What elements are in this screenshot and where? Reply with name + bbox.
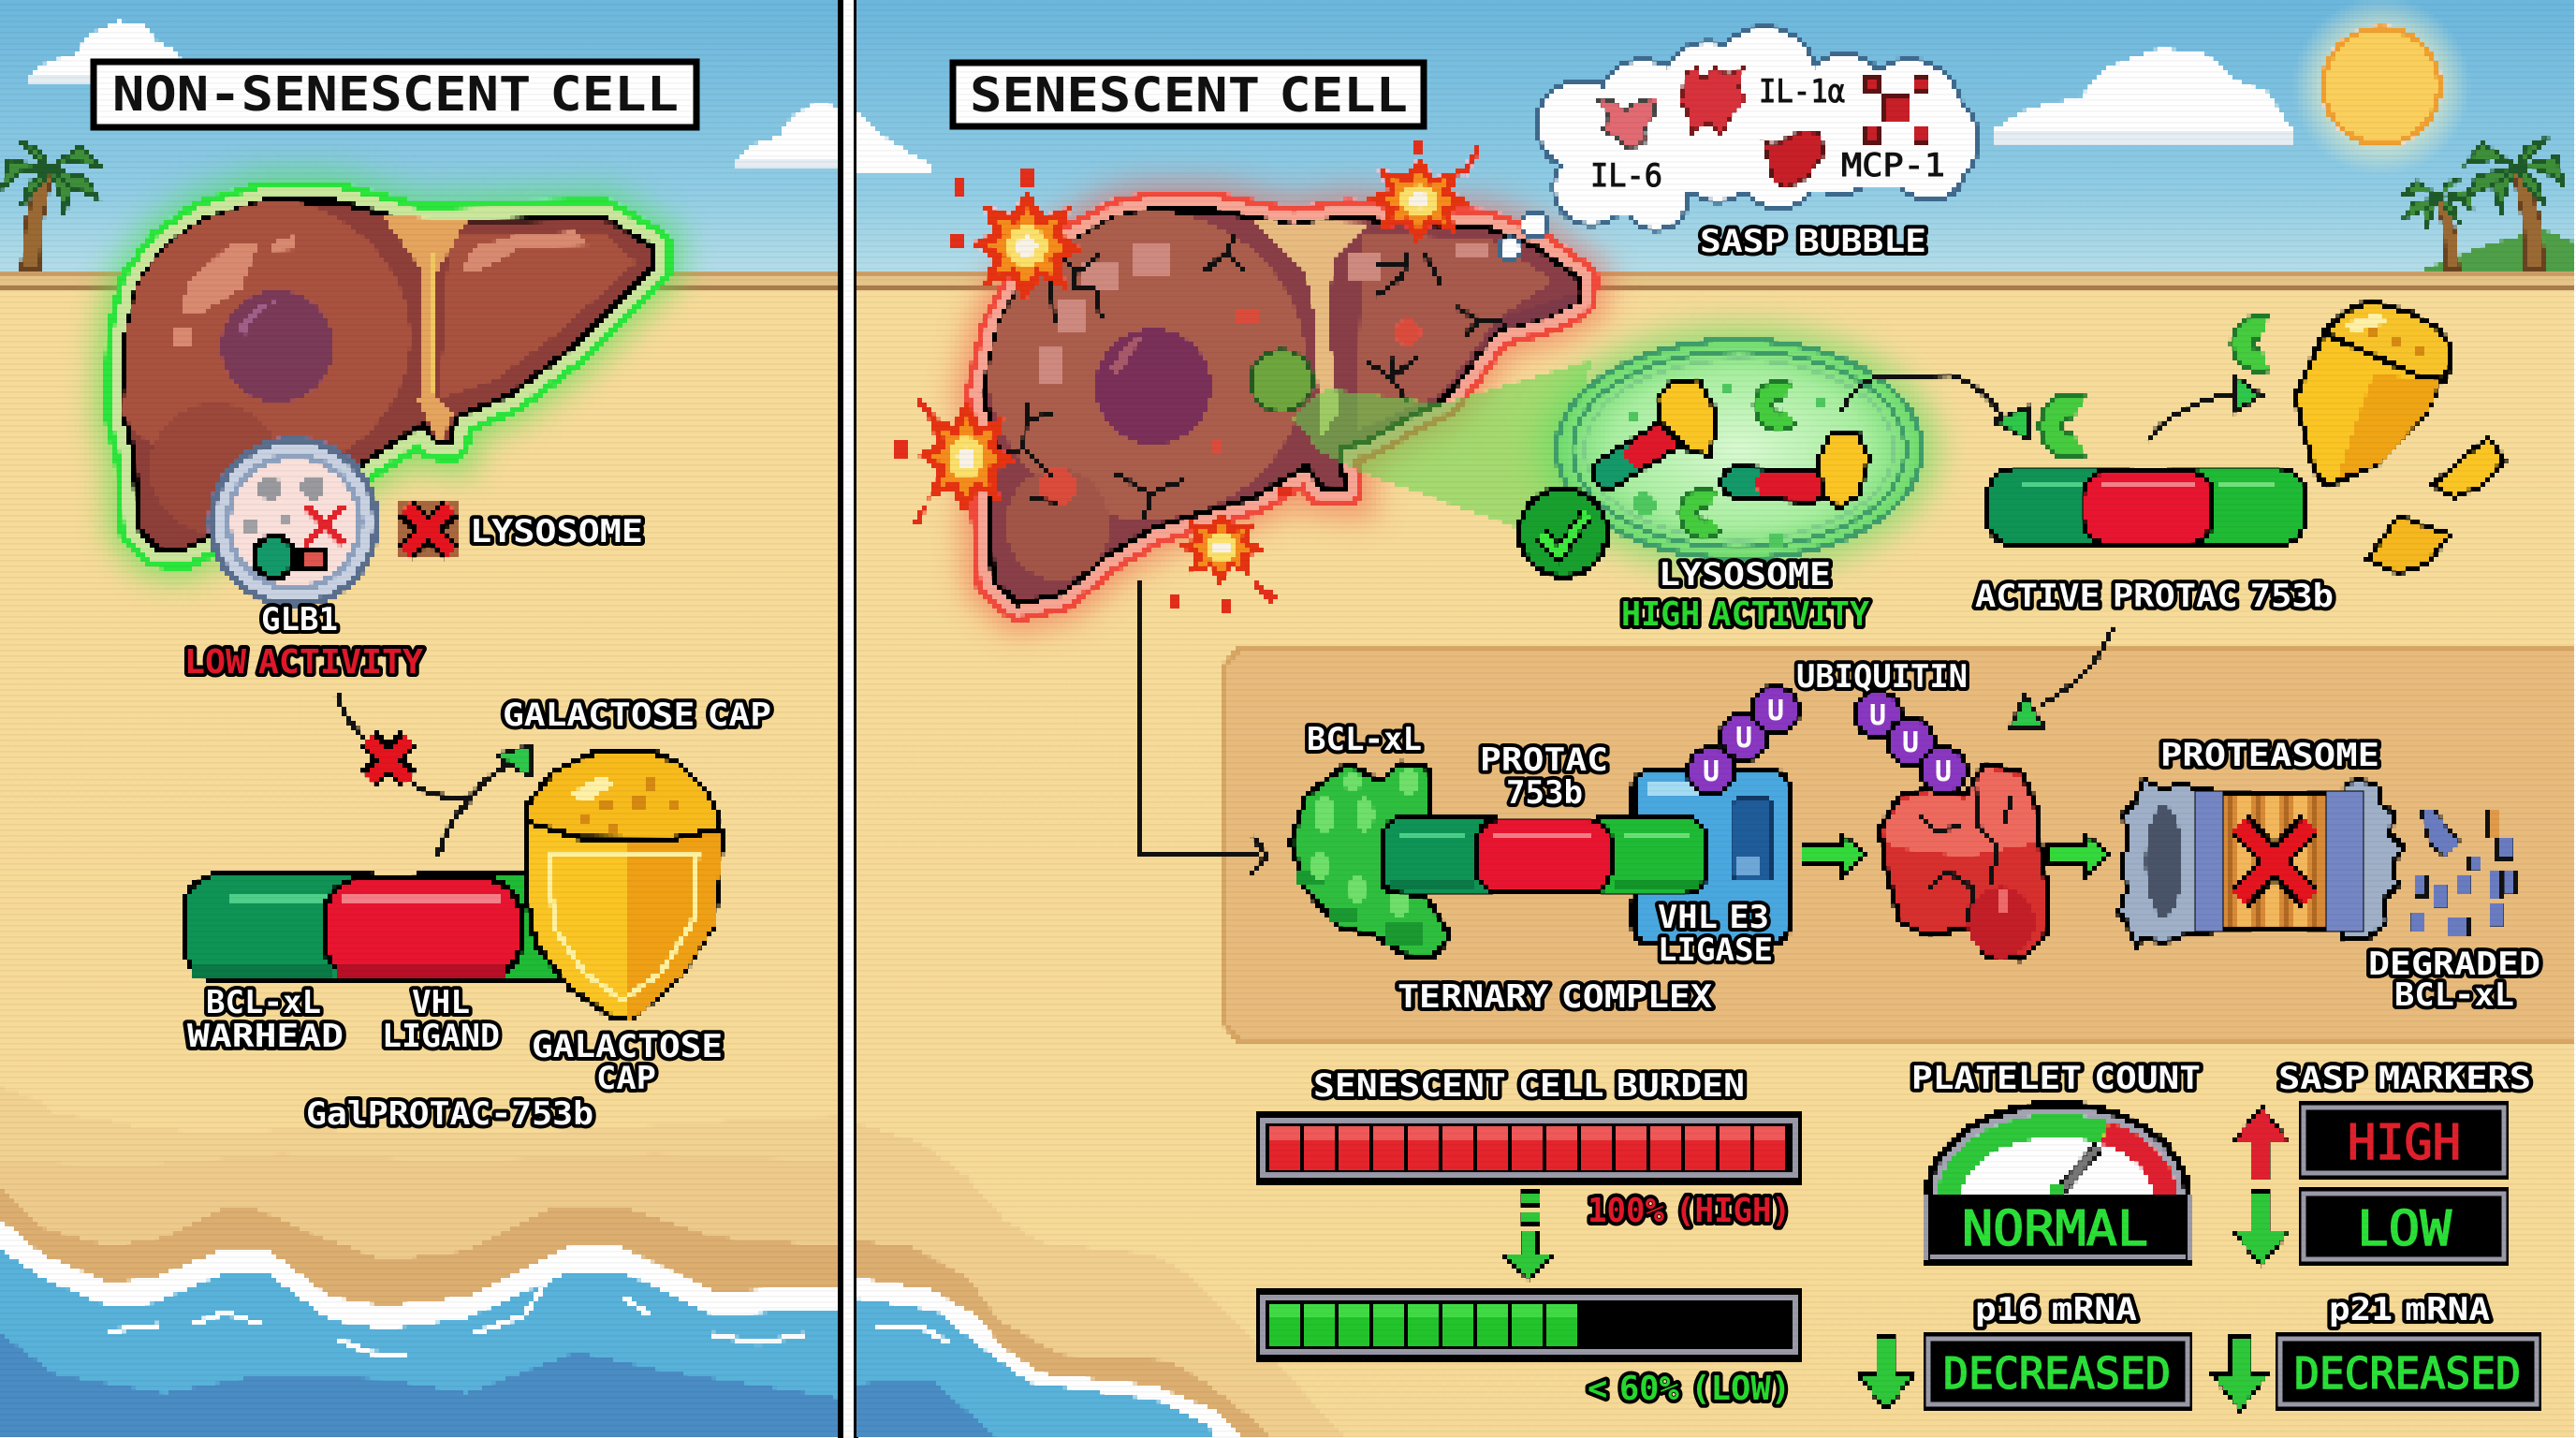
label: PROTAC 753b — [1480, 741, 1608, 812]
display: p21 — [2276, 1332, 2541, 1411]
left panel artwork — [0, 0, 881, 1438]
readout: normal: NORMAL — [1962, 1201, 2148, 1257]
burden bar: low — [1256, 1288, 1802, 1362]
ubiquitin letters: U — [1703, 756, 1720, 788]
falciform ligament — [382, 215, 467, 443]
degraded BCL-xL debris — [2411, 810, 2516, 936]
ubiquitin chain on target — [1854, 691, 1967, 794]
active PROTAC 753b capsule — [1987, 468, 2305, 546]
label: lysosome: LYSOSOME — [470, 513, 643, 550]
explosions — [895, 140, 1481, 612]
label: GalPROTAC-753b: GalPROTAC-753b — [306, 1095, 593, 1133]
label: low activity: LOW ACTIVITY — [184, 643, 423, 682]
readout: low: LOW — [2357, 1201, 2452, 1257]
label: BCL-xL: BCL-xL — [1307, 721, 1422, 758]
ubiquitin letters: U — [1869, 699, 1886, 732]
ubiquitinated BCL-xL — [1880, 763, 2049, 960]
ubiquitin chain on ligase — [1688, 686, 1799, 794]
ubiquitin letters — [1703, 695, 1952, 788]
label: degraded BCL-xL: DEGRADED — [2368, 946, 2540, 983]
readout: p21 decreased: DECREASED — [2294, 1348, 2521, 1399]
label: galactose cap under shield — [532, 1028, 723, 1097]
liver: healthy with green glow — [95, 197, 653, 550]
liver: damaged with red glow — [983, 211, 1582, 604]
label: galactose cap: GALACTOSE CAP — [503, 697, 771, 734]
connector: liver to ternary complex — [1138, 579, 1267, 873]
capsule fragments inside — [1608, 431, 1676, 473]
burden bar: high — [1256, 1111, 1802, 1185]
VHL E3 ligase — [1633, 770, 1789, 944]
label: galactose cap under shield: GALACTOSE — [532, 1028, 723, 1065]
label: ternary complex: TERNARY COMPLEX — [1398, 978, 1713, 1016]
clouds — [28, 21, 881, 169]
arrow: to tagged protein — [1802, 833, 1866, 877]
label: SASP bubble: SASP BUBBLE — [1700, 223, 1926, 260]
ubiquitin letters: U — [1935, 756, 1952, 788]
icon: MCP-1 — [1865, 77, 1928, 142]
label: galactose cap under shield: CAP — [596, 1060, 656, 1097]
readout: high: HIGH — [2348, 1115, 2461, 1171]
background: sky and sand — [0, 0, 838, 1438]
galactose cap shield — [527, 751, 723, 1020]
readout: p16 decreased: DECREASED — [1943, 1348, 2171, 1399]
falciform ligament — [1254, 221, 1368, 440]
gauge display frame — [1924, 1195, 2192, 1266]
value: 100% high: 100% (HIGH) — [1588, 1192, 1791, 1230]
dotted arrow: burden decrease — [1502, 1192, 1555, 1280]
lysosome: low activity — [208, 436, 380, 609]
heading: platelet count: PLATELET COUNT — [1911, 1060, 2201, 1097]
ocean waves — [0, 1186, 838, 1438]
heading: senescent cell burden: SENESCENT CELL BURDEN — [1313, 1067, 1745, 1105]
SASP text labels: IL-6 — [1590, 157, 1662, 195]
palm tree — [3, 140, 100, 270]
ubiquitin letters: U — [1735, 722, 1752, 755]
icon: check badge — [1519, 489, 1607, 577]
right panel artwork — [856, 0, 2576, 1438]
SASP text labels — [1590, 73, 1945, 195]
clouds — [856, 48, 2292, 171]
liver highlights — [171, 231, 591, 346]
ternary complex PROTAC capsule — [1382, 817, 1706, 894]
label: PROTAC 753b: PROTAC — [1480, 741, 1608, 779]
arrow: cap removed — [2147, 376, 2261, 443]
pathway panel: ternary complex — [1225, 649, 2576, 1041]
open galactose cap and shards — [2295, 301, 2505, 573]
label: degraded BCL-xL — [2368, 946, 2540, 1014]
label: active PROTAC 753b: ACTIVE PROTAC 753b — [1975, 578, 2334, 615]
palm trees and hill — [2403, 138, 2576, 270]
arrow: lysosome releases warhead — [1841, 374, 2027, 439]
label: high activity: HIGH ACTIVITY — [1621, 595, 1869, 634]
display: SASP low — [2299, 1187, 2509, 1266]
icon: red capsule molecule — [1764, 131, 1823, 187]
display: SASP high — [2299, 1101, 2509, 1180]
label: VHL E3 ligase: VHL E3 — [1658, 899, 1769, 936]
arrow: blocked cleavage path — [337, 695, 530, 857]
label: ubiquitin: UBIQUITIN — [1796, 658, 1968, 696]
portal vein — [221, 290, 333, 403]
label: VHL ligand — [382, 984, 500, 1055]
zoom spot on liver — [1251, 350, 1312, 412]
panel divider — [838, 0, 858, 1438]
label: PROTAC 753b: 753b — [1506, 774, 1583, 812]
SASP thought bubble — [1499, 24, 1981, 260]
value: under 60% low: < 60% (LOW) — [1588, 1370, 1791, 1408]
arrow: SASP low — [2232, 1192, 2290, 1266]
icon: red X on lysosome — [398, 500, 459, 559]
display: p16 — [1924, 1332, 2192, 1411]
SASP text labels: MCP-1 — [1841, 147, 1945, 184]
BCL-xL protein — [1291, 763, 1451, 958]
proteasome — [2118, 779, 2404, 947]
background: sky and sand — [856, 0, 2576, 1438]
heading: p21 mRNA: p21 mRNA — [2329, 1291, 2490, 1328]
arrow: active PROTAC into pathway — [2010, 625, 2114, 728]
icon: IL-1 alpha — [1679, 67, 1747, 136]
label: VHL E3 ligase: LIGASE — [1658, 932, 1773, 969]
SASP text labels: IL-1α — [1759, 73, 1845, 110]
label: VHL ligand: LIGAND — [382, 1018, 500, 1055]
title: non-senescent cell: NON-SENESCENT CELL — [112, 67, 679, 123]
label: BCL-xL warhead — [187, 984, 344, 1055]
sun — [2292, 0, 2470, 175]
label: degraded BCL-xL: BCL-xL — [2394, 976, 2514, 1014]
ocean corner — [856, 1123, 1348, 1438]
label: VHL ligand: VHL — [412, 984, 470, 1021]
lysosome: high activity — [1538, 323, 1940, 576]
platelet gauge — [1924, 1100, 2192, 1198]
label: VHL E3 ligase — [1658, 899, 1773, 969]
ubiquitin letters: U — [1902, 726, 1919, 759]
label: BCL-xL warhead: BCL-xL — [206, 984, 321, 1021]
green fragments — [2052, 327, 2265, 447]
arrow: p21 decreased — [2212, 1336, 2268, 1411]
icon: IL-6 — [1596, 98, 1657, 150]
label: BCL-xL warhead: WARHEAD — [187, 1018, 344, 1055]
label: lysosome: LYSOSOME — [1659, 556, 1831, 594]
zoom beam: liver to lysosome — [1293, 360, 1591, 541]
arrow: p16 decreased — [1858, 1336, 1914, 1411]
label: GLB1: GLB1 — [261, 601, 338, 638]
heading: SASP markers: SASP MARKERS — [2278, 1060, 2531, 1097]
title: senescent cell: SENESCENT CELL — [970, 68, 1408, 124]
ubiquitin letters: U — [1767, 695, 1784, 727]
label: proteasome: PROTEASOME — [2160, 737, 2379, 774]
GalPROTAC-753b capsule — [184, 874, 580, 981]
panel: non-senescent cell — [0, 0, 881, 1438]
arrow: SASP high — [2232, 1107, 2290, 1180]
arrow: to proteasome — [2047, 833, 2110, 877]
heading: p16 mRNA: p16 mRNA — [1975, 1291, 2137, 1328]
